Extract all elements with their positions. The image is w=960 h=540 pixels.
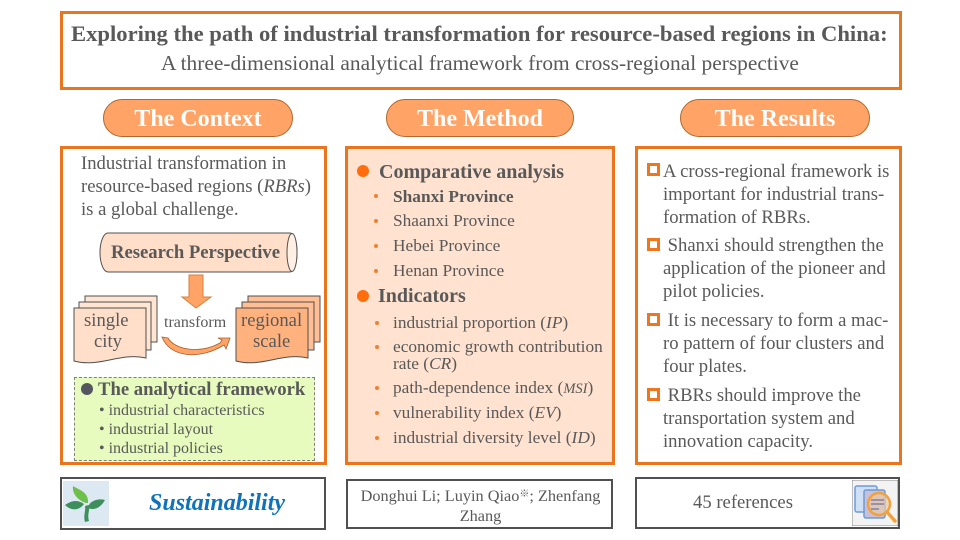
ID: industrial diversity level (ID) — [393, 428, 596, 447]
heading: Comparative analysis — [379, 161, 564, 183]
subtitle: A three-dimensional analytical framework from cross-regional perspective — [161, 51, 799, 75]
stacked documents: regional scale — [236, 296, 320, 363]
result 2: pilot policies. — [663, 281, 765, 302]
icon: documents with magnifier — [852, 480, 898, 526]
CR: economic growth contribution — [393, 337, 603, 356]
framework heading: The analytical framework — [98, 379, 305, 400]
result 2 — [647, 235, 886, 302]
CR — [393, 337, 603, 373]
cylinder: research perspective: Research Perspective — [111, 242, 280, 263]
bullet — [81, 383, 93, 395]
Henan: Henan Province — [393, 261, 504, 280]
stacked documents: single city — [74, 296, 157, 363]
panel: results — [635, 146, 902, 465]
heading: The Context: The Context — [134, 106, 262, 132]
main title: Exploring the path of industrial transformation for resource-based regions in China: — [71, 21, 888, 46]
title box — [60, 11, 902, 90]
heading: The Method — [386, 99, 574, 137]
IP: industrial proportion (IP) — [393, 313, 568, 332]
framework list: • industrial layout — [99, 421, 213, 438]
stacked documents: single city: city — [94, 331, 123, 352]
context intro text: resource-based regions (RBRs) — [81, 176, 311, 197]
cylinder: research perspective — [100, 233, 297, 272]
result 4 — [647, 385, 861, 452]
author names: Zhang — [460, 506, 501, 525]
result 3: It is necessary to form a mac- — [668, 310, 888, 331]
context intro text: is a global challenge. — [81, 199, 238, 220]
result 3 — [647, 310, 888, 377]
Hebei: Hebei Province — [393, 236, 500, 255]
EV: vulnerability index (EV) — [393, 403, 561, 422]
heading: The Method: The Method — [417, 106, 543, 132]
author names — [361, 485, 600, 525]
result 4: innovation capacity. — [663, 431, 813, 452]
stacked documents: regional scale: regional — [241, 310, 302, 331]
label: transform: transform — [164, 314, 227, 331]
indicators section — [357, 285, 603, 447]
result 1: formation of RBRs. — [663, 207, 811, 228]
result 4: transportation system and — [663, 408, 855, 429]
icon: plant logo — [63, 481, 109, 526]
context intro text: Industrial transformation in — [81, 153, 286, 174]
MSI: path-dependence index (MSI) — [393, 378, 593, 397]
heading: The Results: The Results — [715, 106, 835, 132]
result 2: Shanxi should strengthen the — [668, 235, 884, 256]
panel: analytical framework — [74, 377, 315, 461]
framework list: • industrial characteristics — [99, 402, 265, 419]
framework list — [99, 402, 265, 457]
reference count: 45 references — [693, 492, 793, 513]
curved arrow: transform — [162, 337, 230, 355]
context intro text — [81, 153, 311, 220]
box: journal — [60, 477, 326, 530]
bullet — [357, 290, 369, 302]
stacked documents: regional scale: scale — [253, 331, 290, 352]
heading: Indicators — [378, 285, 466, 307]
result 2: application of the pioneer and — [663, 258, 886, 279]
result 3: ro pattern of four clusters and — [663, 333, 884, 354]
author names: Donghui Li; Luyin Qiao※; Zhenfang — [361, 485, 600, 505]
bullet — [357, 165, 369, 177]
CR: rate (CR) — [393, 354, 457, 373]
result 4: RBRs should improve the — [668, 385, 861, 406]
panel: method — [345, 146, 615, 465]
box: references — [635, 477, 900, 529]
heading: The Results — [680, 99, 870, 137]
result 3: four plates. — [663, 356, 747, 377]
result 1 — [647, 161, 889, 228]
heading: The Context — [103, 99, 293, 137]
result 1: important for industrial trans- — [663, 184, 884, 205]
stacked documents: single city: single — [84, 310, 129, 331]
journal name: Sustainability — [149, 490, 285, 516]
panel: context — [60, 146, 327, 465]
Shanxi: Shanxi Province — [393, 187, 514, 206]
Shaanxi: Shaanxi Province — [393, 211, 515, 230]
comparative analysis section — [357, 161, 564, 280]
result 1: A cross-regional framework is — [663, 161, 889, 182]
arrow: down — [182, 275, 211, 308]
framework list: • industrial policies — [99, 440, 223, 457]
box: authors — [346, 479, 613, 529]
